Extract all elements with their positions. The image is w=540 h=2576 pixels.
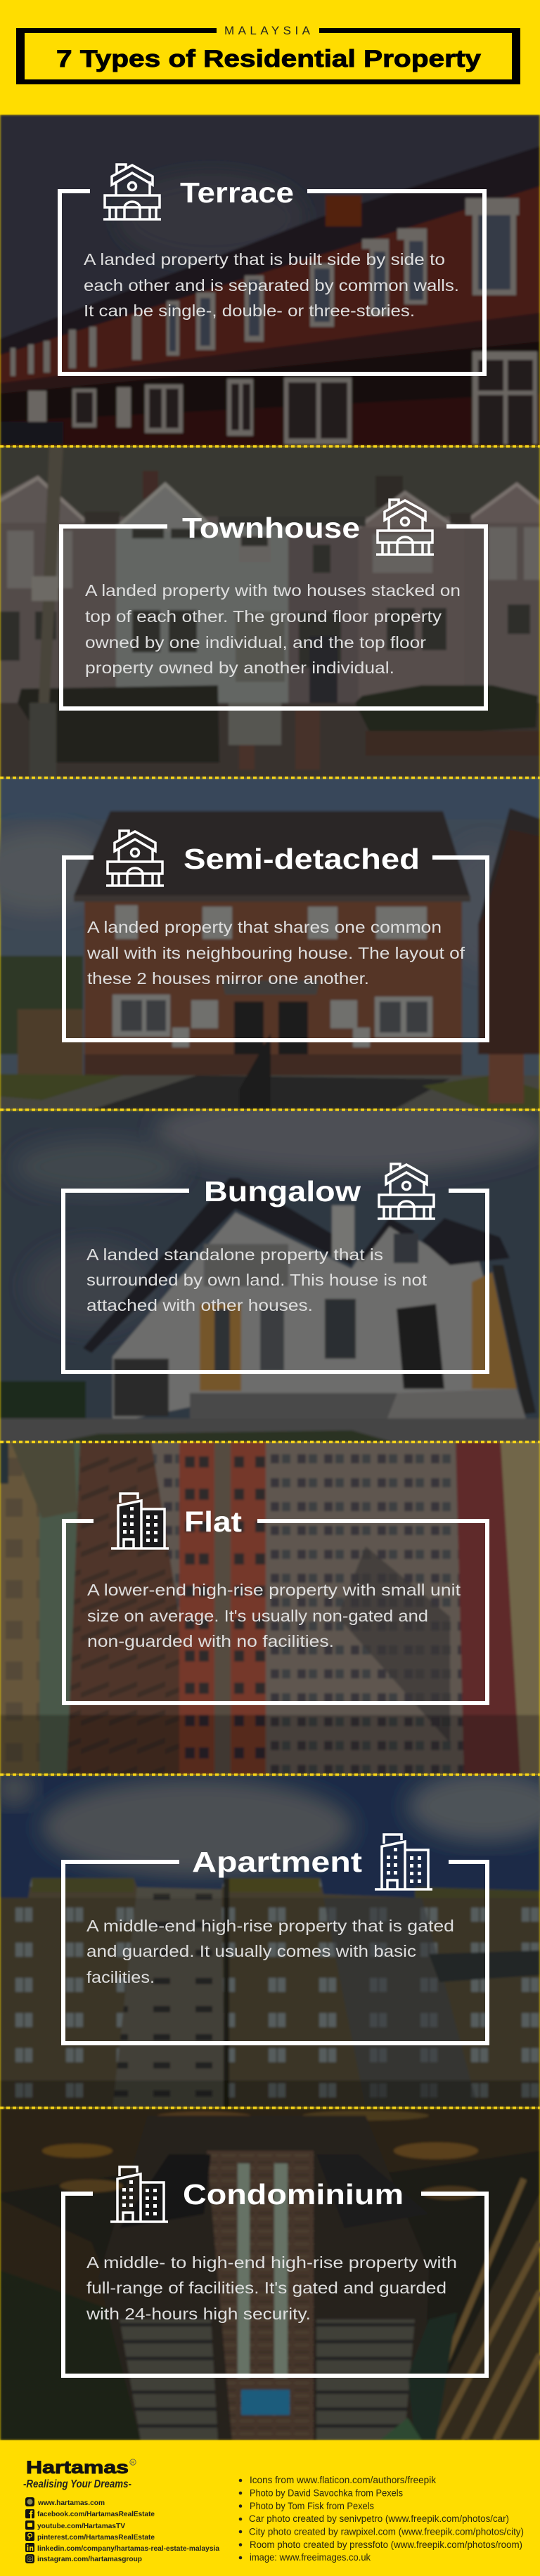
apartment frame [63, 1862, 487, 2043]
link: facebook: facebook.com/HartamasRealEstate [37, 2510, 155, 2518]
link: instagram: instagram.com/hartamasgroup [37, 2555, 142, 2563]
photo: townhouses [0, 446, 540, 778]
text: condominium description: full-range of facilities. It's gated and guarded [86, 2279, 446, 2297]
panel: apartment [0, 1771, 540, 2108]
image credits list: Photo by Tom Fisk from Pexels [250, 2501, 374, 2511]
panel: bungalow [0, 1089, 540, 1442]
text: flat description: A lower-end high-rise property with small unit [87, 1581, 461, 1599]
image credits list: Room photo created by pressfoto (www.freepik.com/photos/room) [250, 2539, 522, 2550]
text: townhouse description [85, 581, 461, 677]
panel: townhouse [0, 446, 540, 778]
title: 7 Types of Residential Property [56, 46, 481, 72]
heading: condominium: Condominium [183, 2178, 404, 2211]
image credits list [239, 2475, 524, 2563]
text: condominium description [86, 2253, 457, 2323]
panel: condominium [0, 2108, 540, 2440]
text: townhouse description: A landed property with two houses stacked on [85, 581, 461, 600]
logo: Hartamas: R [131, 2460, 135, 2466]
text: flat description: non-guarded with no facilities. [87, 1632, 334, 1650]
photo: semi-detached house [0, 777, 540, 1110]
icon: instagram [25, 2554, 34, 2563]
text: terrace description: A landed property that is built side by side to [84, 250, 445, 268]
text: bungalow description: A landed standalone property that is [86, 1245, 383, 1264]
text: flat description [87, 1581, 461, 1650]
panel: flat [0, 1442, 540, 1775]
text: apartment description: facilities. [86, 1968, 155, 1986]
text: bungalow description: attached with other houses. [86, 1296, 313, 1314]
text: apartment description: A middle-end high-rise property that is gated [86, 1917, 454, 1935]
text: terrace description: each other and is separated by common walls. [84, 276, 459, 295]
text: townhouse description: top of each other. The ground floor property [85, 607, 442, 626]
image credits list: Icons from www.flaticon.com/authors/freepik [250, 2475, 436, 2485]
icon: building [375, 1834, 432, 1889]
image credits list: Photo by David Savochka from Pexels [250, 2488, 403, 2498]
image credits list: Car photo created by senivpetro (www.freepik.com/photos/car) [249, 2513, 509, 2524]
photo: terrace houses [0, 115, 540, 446]
text: bungalow description [86, 1245, 428, 1314]
link: pinterest: pinterest.com/HartamasRealEstate [37, 2533, 155, 2542]
panel: terrace [0, 115, 540, 446]
tagline: -Realising Your Dreams- [23, 2478, 131, 2490]
text: townhouse description: property owned by another individual. [85, 659, 394, 677]
icon: youtube [25, 2520, 34, 2530]
icon: building [110, 2167, 168, 2222]
text: apartment description: and guarded. It usually comes with basic [86, 1942, 416, 1960]
heading: bungalow: Bungalow [204, 1175, 361, 1208]
link: website: www.hartamas.com [37, 2499, 105, 2507]
photo: apartment block [0, 1771, 540, 2108]
heading: terrace: Terrace [180, 176, 294, 209]
subtitle: Malaysia: MALAYSIA [224, 24, 311, 37]
text: condominium description: A middle- to high-end high-rise property with [86, 2253, 457, 2272]
flat frame [64, 1521, 487, 1703]
social links [25, 2497, 219, 2563]
icon: building [111, 1494, 169, 1548]
photo: condominium aerial [0, 2108, 540, 2440]
logo: Hartamas: Hartamas [26, 2458, 129, 2478]
footer band [0, 2440, 540, 2576]
photo: flats [0, 1442, 540, 1775]
townhouse frame [61, 526, 486, 708]
heading: apartment: Apartment [192, 1846, 362, 1878]
text: townhouse description: owned by one individual, and the top floor [85, 633, 426, 652]
semi-detached frame [64, 857, 487, 1040]
heading: townhouse: Townhouse [182, 512, 360, 544]
text: terrace description: It can be single-, double- or three-stories. [84, 302, 415, 320]
icon: pinterest [25, 2532, 34, 2541]
heading: semi-detached: Semi-detached [184, 843, 420, 875]
panel: semi-detached [0, 777, 540, 1110]
icon: house [376, 500, 434, 555]
terrace frame [60, 191, 484, 374]
text: semi-detached description: A landed property that shares one common [87, 918, 442, 936]
text: bungalow description: surrounded by own land. This house is not [86, 1271, 428, 1289]
text: terrace description [84, 250, 459, 320]
header band [0, 0, 540, 115]
image credits list: image: www.freeimages.co.uk [250, 2552, 371, 2563]
icon: website [25, 2497, 34, 2506]
bungalow frame [63, 1191, 487, 1372]
image credits list: City photo created by rawpixel.com (www.freepik.com/photos/city) [249, 2526, 524, 2537]
icon: house [378, 1164, 435, 1219]
icon: house [106, 831, 164, 886]
icon: linkedin [25, 2543, 34, 2552]
heading: flat: Flat [184, 1506, 242, 1538]
text: semi-detached description [86, 918, 465, 988]
text: semi-detached description: these 2 houses mirror one another. [87, 969, 369, 988]
text: condominium description: with 24-hours high security. [86, 2305, 311, 2323]
photo: bungalow [0, 1089, 540, 1442]
text: apartment description [86, 1917, 454, 1986]
icon: facebook [25, 2509, 34, 2518]
text: flat description: size on average. It's usually non-gated and [87, 1607, 428, 1625]
text: semi-detached description: wall with its neighbouring house. The layout of [86, 944, 465, 962]
link: youtube: youtube.com/HartamasTV [37, 2522, 125, 2530]
link: linkedin: linkedin.com/company/hartamas-real-estate-malaysia [37, 2544, 219, 2553]
title frame [16, 28, 520, 84]
icon: house [103, 164, 161, 219]
condominium frame [63, 2194, 487, 2376]
